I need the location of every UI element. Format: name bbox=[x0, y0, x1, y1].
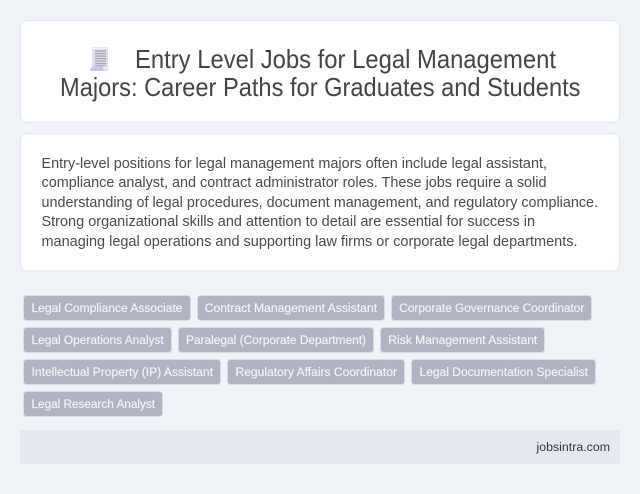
text block: description: Strong organizational skills and attention to detail are essential for success in bbox=[42, 214, 535, 230]
tag: Intellectual Property (IP) Assistant: Intellectual Property (IP) Assistant bbox=[32, 365, 214, 379]
tag: Legal Research Analyst bbox=[24, 392, 162, 416]
tag: Paralegal (Corporate Department): Paralegal (Corporate Department) bbox=[186, 333, 366, 347]
tag: Paralegal (Corporate Department) bbox=[178, 328, 374, 352]
tag: Corporate Governance Coordinator bbox=[392, 296, 592, 320]
title bbox=[60, 46, 580, 102]
icon: legal document scroll bbox=[90, 47, 109, 71]
footer bar bbox=[20, 430, 620, 464]
tag: Legal Research Analyst: Legal Research Analyst bbox=[32, 397, 156, 411]
panel: title card bbox=[20, 20, 620, 122]
footer text: source: jobsintra.com bbox=[535, 440, 610, 454]
text block: description bbox=[42, 156, 598, 250]
panel: description card bbox=[20, 134, 620, 271]
text block: description: Entry-level positions for legal management majors often include legal assistant, bbox=[42, 156, 547, 172]
tag: Legal Documentation Specialist: Legal Documentation Specialist bbox=[420, 365, 589, 379]
title: Majors: Career Paths for Graduates and Students bbox=[60, 74, 580, 102]
tag: Risk Management Assistant: Risk Management Assistant bbox=[388, 333, 538, 347]
tag: Legal Compliance Associate: Legal Compliance Associate bbox=[32, 301, 183, 315]
tag: Regulatory Affairs Coordinator bbox=[228, 360, 404, 384]
tag: Contract Management Assistant bbox=[198, 296, 384, 320]
text block: description: understanding of legal procedures, document management, and regulatory compliance. bbox=[42, 195, 598, 211]
title: Entry Level Jobs for Legal Management bbox=[135, 46, 556, 74]
tag: Regulatory Affairs Coordinator: Regulatory Affairs Coordinator bbox=[236, 365, 397, 379]
tag: Legal Operations Analyst: Legal Operations Analyst bbox=[32, 333, 164, 347]
text block: description: managing legal operations and supporting law firms or corporate legal departments. bbox=[42, 234, 578, 250]
text block: description: compliance analyst, and contract administrator roles. These jobs require a solid bbox=[42, 175, 546, 191]
tag: Intellectual Property (IP) Assistant bbox=[24, 360, 220, 384]
tag: Corporate Governance Coordinator: Corporate Governance Coordinator bbox=[399, 301, 584, 315]
tag: Legal Documentation Specialist bbox=[412, 360, 596, 384]
tag list: job titles bbox=[24, 296, 596, 416]
tag: Legal Operations Analyst bbox=[24, 328, 172, 352]
tag: Contract Management Assistant: Contract Management Assistant bbox=[205, 301, 378, 315]
tag: Risk Management Assistant bbox=[380, 328, 544, 352]
tag: Legal Compliance Associate bbox=[24, 296, 190, 320]
